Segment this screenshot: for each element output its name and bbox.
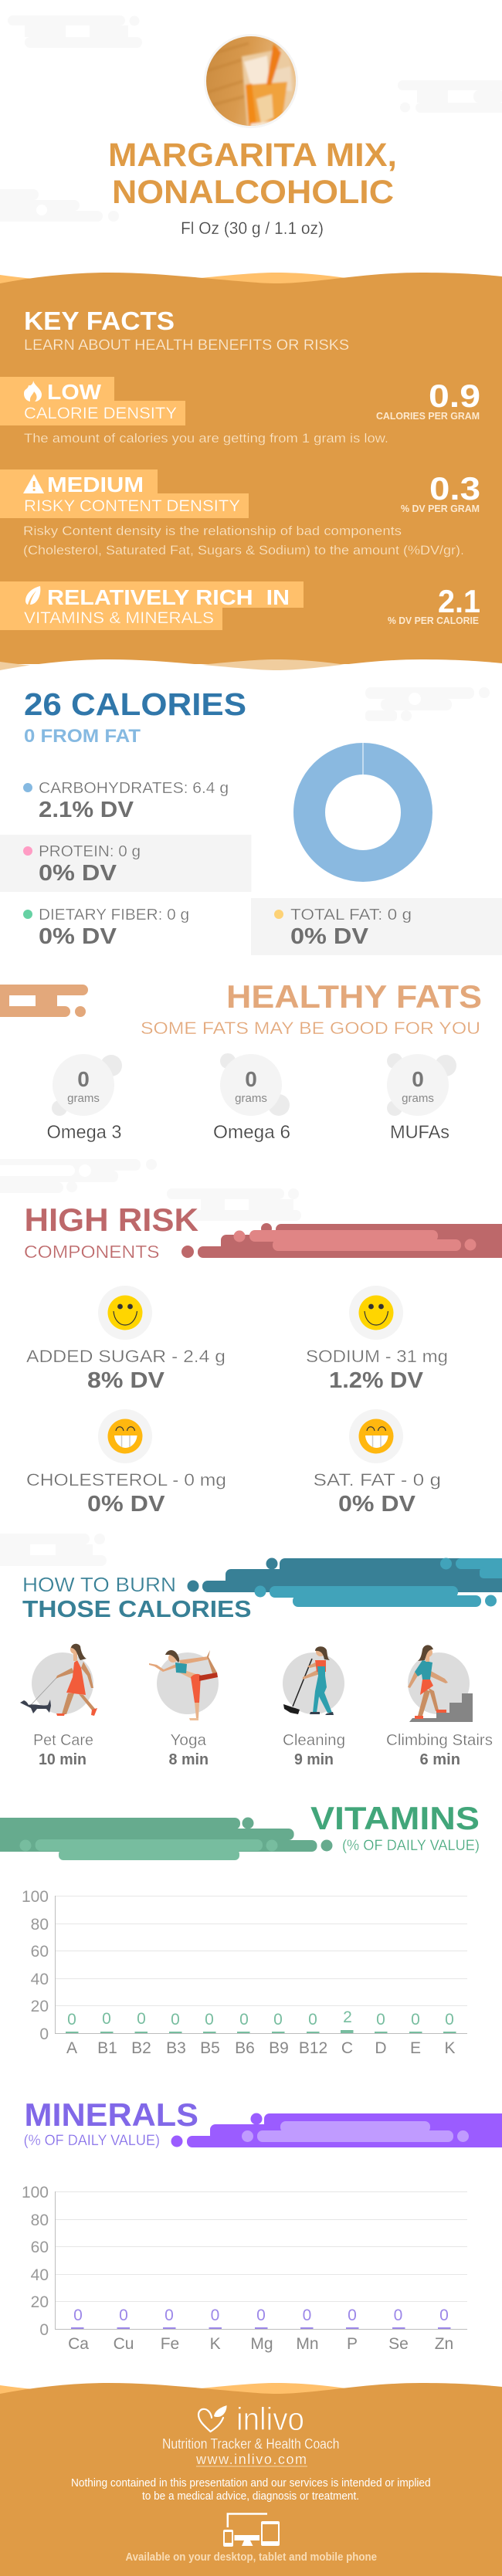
illustration: woman walking dog bbox=[20, 1644, 97, 1716]
activity: pet care: Pet Care bbox=[33, 1732, 93, 1749]
omega 6: Omega 6 bbox=[213, 1122, 290, 1143]
vitamins and minerals richness: RELATIVELY RICH IN bbox=[47, 585, 290, 609]
minerals bar chart: 0 bbox=[348, 2307, 357, 2324]
minerals bar chart: 40 bbox=[31, 2266, 49, 2284]
minerals heading bbox=[24, 2096, 198, 2149]
key facts heading bbox=[24, 307, 349, 354]
high risk heading: HIGH RISK bbox=[25, 1202, 198, 1238]
vitamins bar chart: B2 bbox=[131, 2039, 151, 2057]
risky content density: Risky Content density is the relationship of bad components bbox=[23, 524, 402, 538]
availability note: Available on your desktop, tablet and mobile phone bbox=[125, 2551, 377, 2564]
minerals heading: (% OF DAILY VALUE) bbox=[24, 2133, 160, 2149]
sodium: SODIUM - 31 mg bbox=[306, 1347, 448, 1366]
carbohydrates: 2.1% DV bbox=[39, 798, 134, 822]
minerals bar chart: Mn bbox=[296, 2335, 319, 2353]
activity: cleaning bbox=[283, 1646, 345, 1768]
minerals bar chart: 80 bbox=[31, 2212, 49, 2229]
activity: yoga: 8 min bbox=[168, 1751, 209, 1768]
dietary fiber: 0% DV bbox=[39, 924, 117, 949]
omega 6: 0 bbox=[245, 1067, 257, 1091]
vitamins heading: (% OF DAILY VALUE) bbox=[342, 1838, 480, 1854]
saturated fat: 0% DV bbox=[338, 1492, 416, 1517]
omega 6 bbox=[213, 1053, 290, 1143]
icon: smiley bbox=[358, 1296, 394, 1330]
vitamins bar chart: B1 bbox=[97, 2039, 117, 2057]
high risk heading: COMPONENTS bbox=[24, 1242, 159, 1262]
healthy fats heading: SOME FATS MAY BE GOOD FOR YOU bbox=[141, 1019, 480, 1038]
calories heading: 26 CALORIES bbox=[24, 686, 246, 722]
minerals bar chart bbox=[22, 2184, 467, 2353]
burn heading: HOW TO BURN bbox=[22, 1573, 176, 1596]
vitamins bar chart bbox=[22, 1888, 467, 2057]
vitamins bar chart: 0 bbox=[273, 2011, 283, 2029]
vitamins bar chart: C bbox=[341, 2039, 353, 2057]
minerals bar chart: Cu bbox=[114, 2335, 134, 2353]
minerals bar chart: 0 bbox=[165, 2307, 174, 2324]
minerals bar chart: 20 bbox=[31, 2293, 49, 2311]
total fat: TOTAL FAT: 0 g bbox=[290, 907, 412, 924]
minerals decoration bbox=[171, 2113, 502, 2147]
omega 3: 0 bbox=[77, 1067, 90, 1091]
cholesterol bbox=[26, 1409, 226, 1517]
disclaimer: to be a medical advice, diagnosis or treatment. bbox=[142, 2490, 359, 2503]
omega 3: grams bbox=[67, 1092, 100, 1105]
vitamins bar chart: 0 bbox=[239, 2011, 249, 2029]
vitamins bar chart: 0 bbox=[308, 2011, 317, 2029]
vitamins bar chart: A bbox=[66, 2039, 77, 2057]
activity: climbing stairs bbox=[386, 1645, 493, 1768]
disclaimer: Nothing contained in this presentation and our services is intended or implied bbox=[71, 2476, 431, 2490]
disclaimer bbox=[71, 2476, 431, 2503]
minerals bar chart: Se bbox=[388, 2335, 409, 2353]
calories heading bbox=[24, 686, 246, 747]
vitamins bar chart: 0 bbox=[39, 2025, 49, 2043]
activity: climbing stairs: Climbing Stairs bbox=[386, 1732, 493, 1749]
vitamins bar chart: E bbox=[410, 2039, 421, 2057]
illustration: woman on stairs bbox=[408, 1645, 473, 1722]
calorie density: CALORIE DENSITY bbox=[24, 405, 177, 422]
mufas bbox=[387, 1053, 456, 1143]
calorie density: The amount of calories you are getting from 1 gram is low. bbox=[24, 432, 388, 446]
minerals bar chart: 0 bbox=[256, 2307, 266, 2324]
burn heading bbox=[22, 1573, 252, 1622]
icon: leaf bbox=[25, 586, 40, 605]
title: MARGARITA MIX, bbox=[108, 137, 397, 174]
risky content density: 0.3 bbox=[429, 470, 480, 507]
omega 6: grams bbox=[235, 1092, 267, 1105]
vitamins bar chart: 80 bbox=[31, 1916, 49, 1934]
dietary fiber: DIETARY FIBER: 0 g bbox=[39, 907, 189, 924]
minerals bar chart: Zn bbox=[435, 2335, 453, 2353]
minerals bar chart: 60 bbox=[31, 2239, 49, 2256]
icon: warning triangle bbox=[23, 474, 44, 493]
vitamins bar chart: B5 bbox=[200, 2039, 220, 2057]
vitamins and minerals richness: 2.1 bbox=[438, 583, 480, 619]
mufas: MUFAs bbox=[390, 1122, 449, 1143]
background clouds: high risk bbox=[0, 1159, 301, 1221]
background clouds: header bbox=[0, 15, 502, 222]
tagline: Nutrition Tracker & Health Coach bbox=[162, 2436, 340, 2452]
vitamins bar chart: 0 bbox=[67, 2011, 76, 2029]
healthy fats heading bbox=[141, 978, 482, 1038]
cholesterol: 0% DV bbox=[87, 1492, 165, 1517]
carbohydrates: CARBOHYDRATES: 6.4 g bbox=[39, 780, 229, 797]
background cloud: calories bbox=[365, 687, 490, 721]
risky content density bbox=[0, 469, 480, 558]
mufas: grams bbox=[402, 1092, 434, 1105]
minerals bar chart: 0 bbox=[39, 2321, 49, 2339]
icon: grin bbox=[358, 1419, 394, 1453]
activity: cleaning: 9 min bbox=[294, 1751, 334, 1768]
risky content density: % DV PER GRAM bbox=[401, 503, 480, 514]
icon: flame bbox=[24, 381, 42, 402]
saturated fat: SAT. FAT - 0 g bbox=[314, 1470, 441, 1490]
risky content density: MEDIUM bbox=[47, 473, 144, 497]
vitamins bar chart: B12 bbox=[299, 2039, 327, 2057]
activity: cleaning: Cleaning bbox=[283, 1732, 345, 1749]
cholesterol: CHOLESTEROL - 0 mg bbox=[26, 1470, 226, 1490]
illustration: yoga pose bbox=[149, 1650, 218, 1720]
vitamins bar chart: D bbox=[375, 2039, 387, 2057]
added sugar: ADDED SUGAR - 2.4 g bbox=[26, 1347, 226, 1366]
high risk heading bbox=[24, 1202, 198, 1262]
key facts heading: LEARN ABOUT HEALTH BENEFITS OR RISKS bbox=[24, 337, 349, 354]
activity: yoga: Yoga bbox=[170, 1732, 207, 1749]
illustration: woman sweeping bbox=[283, 1646, 334, 1715]
activity: pet care: 10 min bbox=[39, 1751, 86, 1768]
burn decoration bbox=[187, 1558, 502, 1607]
minerals bar chart: 0 bbox=[119, 2307, 128, 2324]
icon: devices bbox=[223, 2514, 280, 2547]
logo bbox=[198, 2401, 304, 2437]
icon: smiley bbox=[108, 1296, 142, 1330]
vitamins bar chart: 0 bbox=[137, 2010, 146, 2028]
carbohydrates bbox=[23, 780, 229, 822]
healthy fats decoration bbox=[0, 985, 88, 1017]
burn heading: THOSE CALORIES bbox=[22, 1595, 252, 1622]
minerals bar chart: P bbox=[347, 2335, 358, 2353]
minerals bar chart: 0 bbox=[303, 2307, 311, 2324]
donut chart bbox=[309, 743, 417, 866]
minerals bar chart: 100 bbox=[22, 2184, 49, 2201]
footer panel bbox=[0, 2383, 502, 2576]
background cloud: burn bbox=[0, 1534, 107, 1566]
total fat bbox=[251, 898, 502, 955]
total fat: 0% DV bbox=[290, 924, 369, 949]
minerals heading: MINERALS bbox=[25, 2096, 198, 2133]
vitamins bar chart: 0 bbox=[411, 2011, 420, 2029]
icon: grin bbox=[108, 1419, 142, 1453]
minerals bar chart: 0 bbox=[73, 2307, 83, 2324]
vitamins decoration bbox=[0, 1818, 332, 1860]
vitamins bar chart: B6 bbox=[235, 2039, 255, 2057]
high risk decoration bbox=[181, 1223, 502, 1258]
added sugar: 8% DV bbox=[87, 1368, 165, 1393]
title bbox=[108, 137, 397, 211]
added sugar bbox=[26, 1286, 226, 1393]
activity: yoga bbox=[149, 1650, 219, 1768]
omega 3 bbox=[46, 1054, 122, 1143]
serving size: Fl Oz (30 g / 1.1 oz) bbox=[181, 219, 324, 238]
vitamins bar chart: 60 bbox=[31, 1943, 49, 1961]
key facts heading: KEY FACTS bbox=[24, 307, 175, 335]
logo: inlivo bbox=[236, 2401, 304, 2437]
sodium bbox=[306, 1286, 448, 1393]
minerals bar chart: 0 bbox=[211, 2307, 219, 2324]
vitamins bar chart: 0 bbox=[171, 2011, 180, 2029]
minerals bar chart: Fe bbox=[161, 2335, 179, 2353]
protein bbox=[0, 835, 252, 892]
vitamins bar chart: 0 bbox=[205, 2011, 214, 2029]
minerals bar chart: K bbox=[210, 2335, 221, 2353]
mufas: 0 bbox=[412, 1067, 424, 1091]
vitamins and minerals richness: VITAMINS & MINERALS bbox=[24, 609, 214, 627]
protein: 0% DV bbox=[39, 861, 117, 886]
activity: climbing stairs: 6 min bbox=[420, 1751, 460, 1768]
vitamins bar chart: 20 bbox=[31, 1998, 49, 2015]
minerals bar chart: 0 bbox=[439, 2307, 449, 2324]
vitamins bar chart: B3 bbox=[166, 2039, 186, 2057]
vitamins bar chart: 100 bbox=[22, 1888, 49, 1906]
key facts panel bbox=[0, 273, 502, 695]
vitamins bar chart: 0 bbox=[376, 2011, 385, 2029]
minerals bar chart: 0 bbox=[394, 2307, 402, 2324]
saturated fat bbox=[314, 1409, 441, 1517]
vitamins bar chart: 40 bbox=[31, 1971, 49, 1988]
vitamins heading bbox=[310, 1800, 480, 1854]
risky content density: RISKY CONTENT DENSITY bbox=[24, 497, 240, 515]
omega 3: Omega 3 bbox=[46, 1122, 122, 1143]
vitamins heading: VITAMINS bbox=[310, 1800, 480, 1836]
vitamins bar chart: K bbox=[444, 2039, 456, 2057]
food photo bbox=[204, 34, 298, 128]
calories heading: 0 FROM FAT bbox=[24, 726, 141, 747]
vitamins bar chart: 2 bbox=[343, 2008, 352, 2026]
website: www.inlivo.com bbox=[195, 2452, 307, 2467]
sodium: 1.2% DV bbox=[329, 1368, 424, 1393]
risky content density: (Cholesterol, Saturated Fat, Sugars & Sodium) to the amount (%DV/gr). bbox=[23, 544, 464, 558]
dietary fiber bbox=[23, 907, 189, 949]
title: NONALCOHOLIC bbox=[112, 174, 394, 211]
calorie density bbox=[0, 377, 480, 446]
vitamins bar chart: 0 bbox=[445, 2011, 454, 2029]
vitamins and minerals richness: % DV PER CALORIE bbox=[388, 615, 479, 626]
calorie density: 0.9 bbox=[429, 378, 480, 414]
protein: PROTEIN: 0 g bbox=[39, 843, 141, 860]
vitamins bar chart: B9 bbox=[269, 2039, 289, 2057]
activity: pet care bbox=[20, 1644, 97, 1768]
vitamins bar chart: 0 bbox=[102, 2010, 111, 2028]
vitamins and minerals richness bbox=[0, 581, 480, 630]
minerals bar chart: Mg bbox=[250, 2335, 273, 2353]
minerals bar chart: Ca bbox=[68, 2335, 89, 2353]
calorie density: LOW bbox=[47, 380, 102, 404]
healthy fats heading: HEALTHY FATS bbox=[226, 978, 482, 1015]
calorie density: CALORIES PER GRAM bbox=[376, 410, 480, 422]
